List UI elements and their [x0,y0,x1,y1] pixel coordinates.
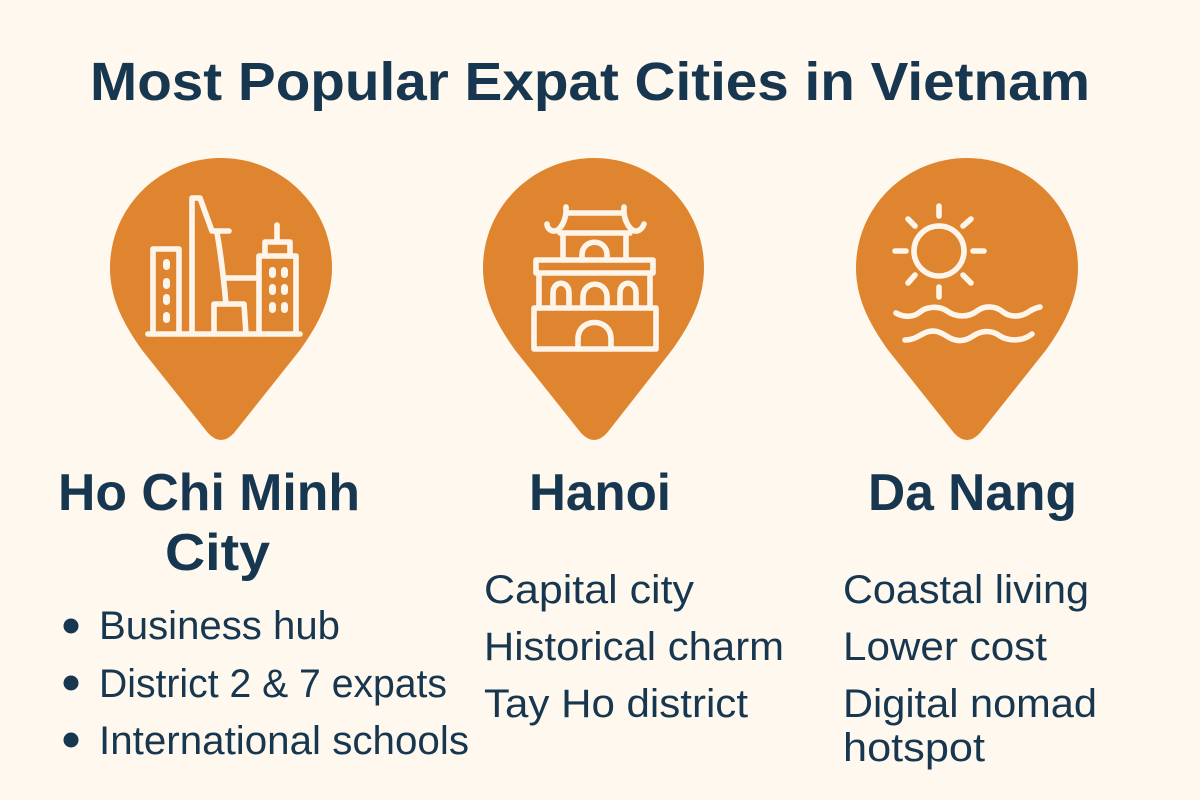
heading: Ho Chi Minh City: City [165,524,270,582]
panel: Da Nang [843,158,1097,770]
text list: Hanoi: Historical charm [484,625,784,669]
icon: historic gate tower [534,207,656,349]
bullet list: Ho Chi Minh City: Business hub [99,604,340,648]
heading: Ho Chi Minh City [58,464,360,582]
text list: Hanoi [484,568,784,726]
text list: Da Nang: Coastal living [843,568,1089,612]
text list: Da Nang: Digital nomad [843,682,1097,726]
text list: Da Nang [843,568,1097,770]
heading: Ho Chi Minh City: Ho Chi Minh [58,464,360,522]
map pin: Da Nang [856,158,1078,440]
bullet list: Ho Chi Minh City: District 2 & 7 expats [99,662,447,706]
title: Most Popular Expat Cities in Vietnam [90,52,1090,112]
text list: Hanoi: Capital city [484,568,694,612]
panel: Hanoi [483,158,784,726]
map pin: Ho Chi Minh City [110,158,332,440]
bullet list: Ho Chi Minh City [64,604,469,763]
text list: Hanoi: Tay Ho district [484,682,748,726]
text list: Da Nang: hotspot [843,726,985,770]
heading: Hanoi: Hanoi [529,464,671,522]
icon: sun over waves [895,206,1040,340]
text list: Da Nang: Lower cost [843,625,1047,669]
bullet list: Ho Chi Minh City: International schools [99,719,469,763]
map pin: Hanoi [483,158,704,440]
panel: Ho Chi Minh City [58,158,469,763]
icon: city skyline [148,198,300,334]
heading: Da Nang: Da Nang [868,464,1077,522]
